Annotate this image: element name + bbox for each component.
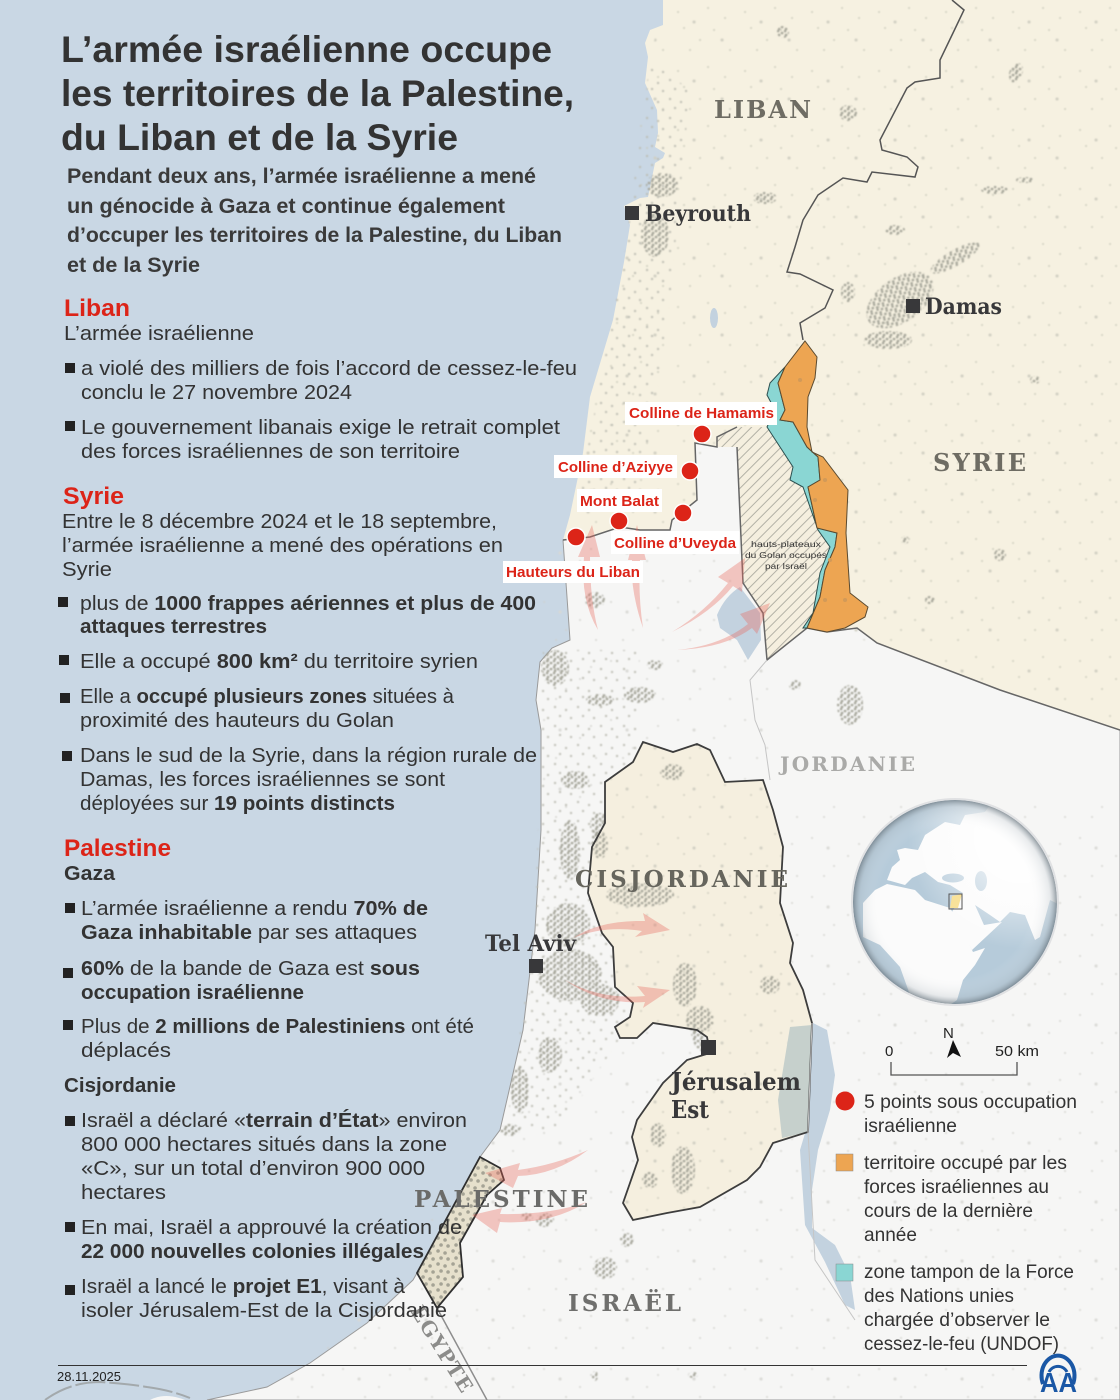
bullet: cease-fire violations: conclu le 27 novembre 2024 xyxy=(81,381,352,404)
globe: white fade xyxy=(920,800,1056,936)
bullet: 19 points: Dans le sud de la Syrie, dans la région rurale de xyxy=(80,744,537,767)
bullet: Golan zones: Elle a occupé plusieurs zones situées à xyxy=(80,685,455,708)
arrow: towards Mont Balat xyxy=(628,525,646,628)
bullet: projet E1: Israël a lancé le projet E1, visant à xyxy=(81,1275,406,1298)
subtitle: et de la Syrie xyxy=(67,253,200,277)
map: Lake Tiberias and small lakes xyxy=(710,308,761,660)
title: du Liban et de la Syrie xyxy=(61,117,458,158)
map: dots inside occupied zone xyxy=(800,380,845,600)
legend item: UNDOF buffer zone: des Nations unies xyxy=(864,1285,1014,1307)
bullet: 60%: occupation israélienne xyxy=(81,981,304,1004)
legend xyxy=(836,1091,1077,1355)
title: les territoires de la Palestine, xyxy=(61,73,574,114)
bullet: projet E1: isoler Jérusalem-Est de la Cisjordanie xyxy=(81,1299,447,1322)
bullet: strikes: attaques terrestres xyxy=(80,615,267,638)
map: UNDOF buffer zone xyxy=(767,367,837,628)
legend item: occupied territory: année xyxy=(864,1224,917,1246)
city: Tel Aviv xyxy=(485,931,577,973)
heading: Liban: Liban xyxy=(64,295,130,322)
bullet: terrain d'Etat: «C», sur un total d’environ 900 000 xyxy=(81,1157,425,1180)
label: Jordanie: JORDANIE xyxy=(778,752,915,776)
logo: Anadolu Agency xyxy=(1040,1356,1077,1398)
bullet: Lebanese government demand: Le gouvernement libanais exige le retrait complet xyxy=(81,416,560,439)
heading: Syrie: Syrie xyxy=(63,483,124,510)
bullet: 19 points xyxy=(62,744,537,815)
legend item: red points: 5 points sous occupation xyxy=(864,1091,1077,1113)
red point: Colline d'Aziyye xyxy=(554,455,699,480)
arrow: Gaza north xyxy=(485,1150,588,1188)
map labels: cities xyxy=(485,201,1002,1124)
title: L’armée israélienne occupe xyxy=(61,29,552,70)
red point: Colline d'Aziyye: Colline d’Aziyye xyxy=(558,459,673,476)
city: Tel Aviv: Tel Aviv xyxy=(485,931,577,957)
globe: inner seas xyxy=(942,871,987,891)
legend item: red points xyxy=(836,1091,1077,1137)
map: land of Israel, Jordan and Egypt xyxy=(207,430,1120,1400)
legend item: red points: israélienne xyxy=(864,1115,957,1137)
bullet: Lebanese government demand xyxy=(65,416,560,463)
map: Egypt border line xyxy=(437,1308,487,1400)
text: intro Syrie xyxy=(62,510,503,581)
map: Lebanon and Syria border xyxy=(787,0,964,340)
label: Liban: LIBAN xyxy=(714,95,811,124)
bullet: 70% xyxy=(65,897,428,944)
bullet: 60% xyxy=(63,957,420,1004)
shaded zone beside the Dead Sea xyxy=(778,1025,812,1138)
subheading: Gaza: Gaza xyxy=(64,862,116,885)
map: occupied Golan Heights hatched xyxy=(717,427,830,660)
label: Israël: ISRAËL xyxy=(568,1289,681,1317)
arrow: West Bank north xyxy=(573,913,670,938)
red point: Colline d'Uveyda xyxy=(611,504,739,554)
bullet: terrain d'Etat: Israël a déclaré « terrain d’État » environ xyxy=(81,1109,467,1132)
label: Golan Heights note xyxy=(745,539,827,571)
globe: region marker xyxy=(949,894,962,909)
arrows: Israeli incursions xyxy=(472,525,770,1233)
label: Golan Heights note: hauts-plateaux xyxy=(751,539,822,549)
subtitle: Pendant deux ans, l’armée israélienne a mené xyxy=(67,164,536,188)
map: Mediterranean sand bar at the bottom xyxy=(45,1382,190,1400)
arrow: towards Golan south xyxy=(677,603,770,650)
bullet: 70%: L’armée israélienne a rendu 70% de xyxy=(81,897,428,920)
panel: Palestine xyxy=(63,835,474,1322)
arrow: West Bank south xyxy=(565,980,670,1008)
map: Lebanon and Syria land xyxy=(563,0,1120,730)
city: Jérusalem Est: Est xyxy=(671,1095,709,1124)
red point: Hauteurs du Liban xyxy=(503,528,643,583)
legend item: occupied territory: territoire occupé par les xyxy=(864,1152,1067,1174)
legend item: occupied territory: forces israéliennes au xyxy=(864,1176,1049,1198)
scale bar and north arrow: 0 xyxy=(885,1043,893,1060)
footer: date: 28.11.2025 xyxy=(57,1369,121,1384)
scale bar and north arrow: N xyxy=(943,1025,954,1042)
city: Jérusalem Est: Jérusalem xyxy=(669,1067,801,1096)
globe: Eurasia land xyxy=(887,806,1057,950)
bullet: terrain d'Etat: 800 000 hectares situés dans la zone xyxy=(81,1133,447,1156)
bullet: 19 points: déployées sur 19 points distincts xyxy=(80,792,395,815)
bullet: 22 000 colonies: 22 000 nouvelles colonies illégales xyxy=(81,1240,424,1263)
red point: Colline de Hamamis: Colline de Hamamis xyxy=(629,405,774,422)
subheading: Cisjordanie: Cisjordanie xyxy=(64,1074,176,1097)
bullet: 60%: 60% de la bande de Gaza est sous xyxy=(81,957,420,980)
map: territory occupied by Israel in the last year xyxy=(778,341,868,632)
label: Syrie: SYRIE xyxy=(933,448,1026,477)
legend item: occupied territory xyxy=(836,1152,1067,1246)
arrow: towards Hauteurs du Liban xyxy=(578,525,600,630)
subtitle: d’occuper les territoires de la Palestine, du Liban xyxy=(67,223,562,247)
bullet: 2 millions: déplacés xyxy=(81,1039,171,1062)
bullet: projet E1 xyxy=(65,1275,447,1322)
city: Jérusalem Est xyxy=(669,1040,801,1124)
red point: Mont Balat xyxy=(577,489,662,530)
legend item: UNDOF buffer zone: chargée d’observer le xyxy=(864,1309,1050,1331)
scale bar and north arrow xyxy=(885,1025,1039,1075)
text: intro Syrie: Entre le 8 décembre 2024 et le 18 septembre, xyxy=(62,510,497,533)
bullet: strikes: plus de 1000 frappes aériennes et plus de 400 xyxy=(80,592,536,615)
red point: Colline d'Uveyda: Colline d’Uveyda xyxy=(614,535,737,552)
bullet: 70%: Gaza inhabitable par ses attaques xyxy=(81,921,417,944)
map: settlement texture xyxy=(267,0,1120,1400)
map: Gaza Strip xyxy=(417,1157,504,1308)
bullet: terrain d'Etat xyxy=(65,1109,467,1204)
bullet: 2 millions xyxy=(63,1015,474,1062)
logo: Anadolu Agency: AA xyxy=(1040,1367,1077,1398)
label: Cisjordanie: CISJORDANIE xyxy=(575,866,788,893)
map labels: countries and territories xyxy=(406,95,1026,1397)
panel: Liban xyxy=(64,295,577,463)
title xyxy=(61,29,574,158)
bullet: cease-fire violations: a violé des milliers de fois l’accord de cessez-le-feu xyxy=(81,357,577,380)
bullet: 22 000 colonies: En mai, Israël a approuvé la création de xyxy=(81,1216,462,1239)
bullet: cease-fire violations xyxy=(65,357,577,404)
locator globe xyxy=(851,798,1059,1006)
bullet: 800 km2: Elle a occupé 800 km² du territoire syrien xyxy=(80,650,478,673)
map: West Bank xyxy=(588,742,812,1220)
red point: Colline de Hamamis xyxy=(625,402,777,443)
text: intro Syrie: l’armée israélienne a mené des opérations en xyxy=(62,534,503,557)
text: intro Syrie: Syrie xyxy=(62,558,112,581)
bullet: 22 000 colonies xyxy=(65,1216,462,1263)
heading: Palestine: Palestine xyxy=(64,835,171,862)
globe: Africa land xyxy=(863,884,985,1015)
bullet: 2 millions: Plus de 2 millions de Palestiniens ont été xyxy=(81,1015,474,1038)
bullet: strikes xyxy=(58,592,536,638)
scale bar and north arrow: 50 km xyxy=(995,1043,1039,1060)
globe: shading xyxy=(853,800,1057,1004)
subtitle: un génocide à Gaza et continue également xyxy=(67,194,505,218)
legend item: UNDOF buffer zone xyxy=(836,1261,1074,1355)
legend item: UNDOF buffer zone: zone tampon de la Force xyxy=(864,1261,1074,1283)
arrow: Gaza south xyxy=(472,1202,587,1233)
footer: rule line xyxy=(58,1364,1027,1366)
panel: Syrie xyxy=(58,483,537,815)
label: Golan Heights note: par Israël xyxy=(765,561,807,571)
map: Dead Sea xyxy=(800,1023,855,1310)
legend item: occupied territory: cours de la dernière xyxy=(864,1200,1033,1222)
arrow: towards Golan north xyxy=(672,558,745,632)
bullet: terrain d'Etat: hectares xyxy=(81,1181,166,1204)
subtitle xyxy=(67,164,562,277)
label: Golan Heights note: du Golan occupés xyxy=(745,550,827,560)
label: Égypte: EGYPTE xyxy=(406,1301,478,1397)
map: Jordan border xyxy=(750,660,855,1320)
text: intro Liban: L’armée israélienne xyxy=(64,322,254,345)
map: Israeli border around north finger and Golan xyxy=(563,427,1120,730)
bullet: Golan zones xyxy=(60,685,455,732)
label: Palestine: PALESTINE xyxy=(414,1186,588,1213)
bullet: Lebanese government demand: des forces israéliennes de son territoire xyxy=(81,440,460,463)
city: Beyrouth: Beyrouth xyxy=(645,201,751,227)
legend item: UNDOF buffer zone: cessez-le-feu (UNDOF) xyxy=(864,1333,1059,1355)
city: Damas: Damas xyxy=(925,294,1002,320)
red point: Mont Balat: Mont Balat xyxy=(580,493,659,510)
bullet: 19 points: Damas, les forces israéliennes se sont xyxy=(80,768,445,791)
red point: Hauteurs du Liban: Hauteurs du Liban xyxy=(506,564,640,581)
bullet: Golan zones: proximité des hauteurs du Golan xyxy=(80,709,394,732)
